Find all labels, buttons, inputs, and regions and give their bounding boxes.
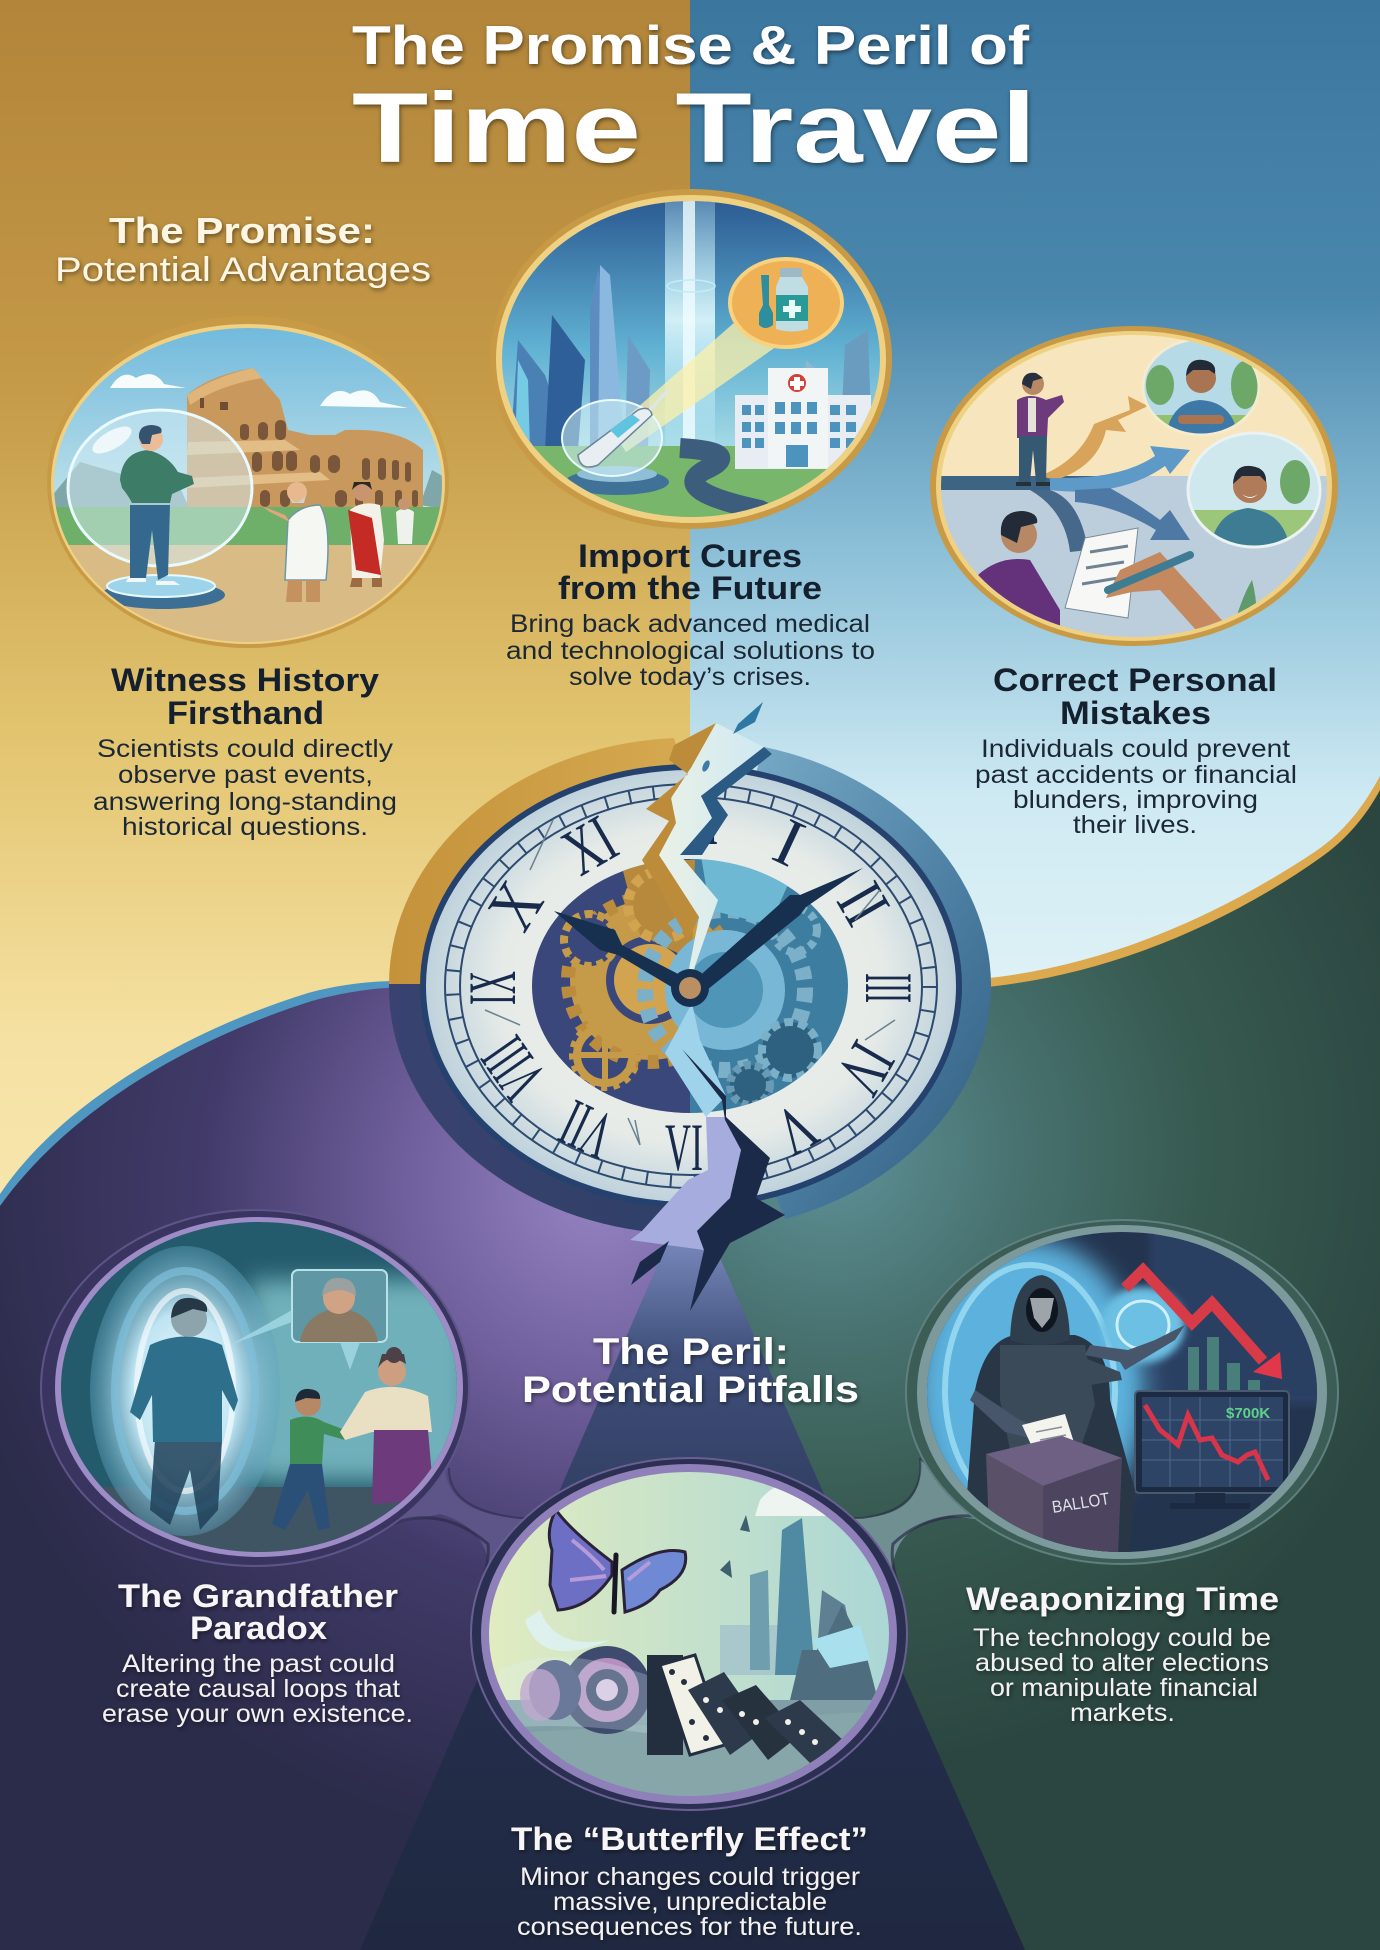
text: import cures: Import Cures [578,538,802,574]
roman numerals [454,783,927,1185]
background: peril green panel [690,783,1380,1950]
clock rim: gold [389,738,690,984]
roman numerals: IX [454,971,530,1005]
shard: blue [733,702,763,734]
text: correct mistakes: Mistakes [1060,695,1211,731]
clouds [110,374,408,408]
roman numerals: I [763,803,816,881]
text: witness history [93,662,397,841]
text: butterfly effect: The “Butterfly Effect” [511,1821,868,1857]
gold arrow [1040,396,1148,480]
crack: blue edge [680,747,772,855]
text: correct mistakes: Individuals could prevent [981,735,1290,763]
text: grandfather paradox: create causal loops that [116,1675,400,1703]
background: dark centre wedge [360,1190,1025,1950]
crack: lower gap [630,1117,741,1250]
text: correct mistakes: blunders, improving [1013,786,1258,814]
hospital [735,368,871,469]
roman numerals: III [851,973,927,1003]
text: correct mistakes: past accidents or financial [975,761,1297,789]
writing hand [1106,552,1222,629]
ballot paper [1022,1414,1077,1460]
bar chart [1188,1337,1260,1395]
yellow beam [622,323,774,452]
panel: import cures illustration [490,189,900,536]
writing man [978,511,1060,626]
background: promise blue panel [690,0,1380,1000]
energy swirl [915,1240,1145,1540]
text: grandfather paradox: Paradox [190,1610,327,1646]
text: grandfather paradox [102,1578,413,1728]
curve: blue divider left [0,980,440,1206]
ballot box: BALLOT [1051,1489,1111,1517]
heading: the promise: The Promise: [109,210,375,251]
heading: the promise: Potential Advantages [55,251,431,289]
text: grandfather paradox: erase your own existence. [102,1700,413,1728]
text: import cures: Bring back advanced medical [510,610,870,638]
boy [272,1389,345,1530]
futuristic towers [510,265,872,450]
title [352,14,1036,183]
pedestal [104,588,225,609]
title: Time Travel [352,72,1036,183]
heading: the promise [55,210,431,289]
capsule bubble [562,390,669,495]
text: witness history: historical questions. [122,813,368,841]
text: weaponizing time: The technology could be [973,1624,1271,1652]
clock gears [532,859,848,1113]
text: weaponizing time [966,1581,1279,1727]
text: butterfly effect: massive, unpredictable [553,1888,827,1916]
bubble [68,410,252,566]
roman numerals: XI [550,800,629,890]
text: import cures [506,538,875,691]
blue arrow [1050,446,1190,492]
curve: gold divider right [925,776,1380,990]
panel: weaponizing time illustration [906,1220,1338,1564]
roman numerals: VII [549,1085,624,1174]
text: butterfly effect [511,1821,868,1941]
text: correct mistakes [975,662,1297,839]
roman in red toga [350,503,384,578]
butterfly [549,1510,686,1612]
central clock [389,702,991,1311]
panel: witness history illustration [40,316,460,648]
clock hands [554,868,863,1007]
hooded figure [960,1275,1185,1555]
text: weaponizing time: Weaponizing Time [966,1581,1279,1617]
crack: light sliver [665,1003,726,1117]
text: weaponizing time: or manipulate financial [990,1674,1258,1702]
text: weaponizing time: abused to alter elections [975,1649,1269,1677]
text: butterfly effect: consequences for the future. [517,1913,862,1941]
text: witness history: observe past events, [118,761,373,789]
connector band between peril circles [385,1458,1003,1600]
heading: the peril: The Peril: [593,1331,789,1372]
text: import cures: and technological solutions to [506,637,875,665]
crack lines on face [485,820,895,1145]
red falling arrow [1125,1270,1282,1379]
roman numerals: II [696,783,718,859]
shard: small [701,759,711,773]
cloud [755,1483,875,1516]
clock rim: navy [389,984,690,1231]
text: witness history: Firsthand [167,695,324,731]
text: import cures: solve today’s crises. [569,663,811,691]
text: witness history: Scientists could directly [97,735,394,763]
standing man [1016,373,1064,486]
text: butterfly effect: Minor changes could trigger [520,1863,860,1891]
roman numerals: V [763,1088,830,1171]
shard: dark [631,1241,669,1285]
roman numerals: X [472,868,558,943]
grandmother [340,1347,434,1504]
future self top [1144,340,1258,434]
crack: dark fissure [682,1049,785,1311]
roman in white toga [285,505,328,580]
roman numerals: IV [821,1030,910,1107]
hills [40,462,450,510]
text: grandfather paradox: Altering the past could [122,1650,395,1678]
background: promise gold panel [0,0,690,1220]
traveller [130,1298,238,1530]
paper [1065,528,1138,618]
memory box [292,1270,387,1370]
vial bubble [730,259,842,347]
heading: the peril [522,1331,859,1410]
time swirls [490,1610,660,1735]
future self bottom [1190,434,1318,546]
title: The Promise & Peril of [352,14,1030,76]
light beam [665,190,715,450]
colosseum [187,368,423,507]
ruined city [720,1515,878,1700]
text: correct mistakes: Correct Personal [993,662,1277,698]
ballot box [986,1436,1122,1555]
minute track [445,784,937,1188]
crack: gold shard [642,723,716,940]
monitor with stock chart: $700K [1226,1405,1270,1422]
text: witness history: Witness History [111,662,379,698]
text: import cures: from the Future [558,570,822,606]
dark arrow [1075,488,1190,540]
background: peril purple panel [0,982,690,1950]
dominoes [647,1655,845,1765]
text: witness history: answering long-standing [93,788,397,816]
roman numerals: VI [665,1109,703,1185]
distant roman [396,508,414,544]
text: weaponizing time: markets. [1070,1699,1175,1727]
text: correct mistakes: their lives. [1073,811,1197,839]
road [679,438,768,514]
roman numerals: VIII [466,1024,560,1113]
crack: upper gap [659,723,764,988]
time portal [90,1246,280,1536]
heading: the peril: Potential Pitfalls [522,1369,859,1410]
clock rim: blue [690,747,991,1219]
monitor with stock chart [1135,1391,1289,1509]
panel: grandfather paradox illustration [41,1210,470,1566]
clock face [423,767,959,1205]
man [130,505,170,580]
text: grandfather paradox: The Grandfather [118,1578,398,1614]
panel: butterfly effect illustration [471,1458,907,1810]
panel: correct mistakes illustration [930,326,1340,646]
roman numerals: II [822,870,905,937]
